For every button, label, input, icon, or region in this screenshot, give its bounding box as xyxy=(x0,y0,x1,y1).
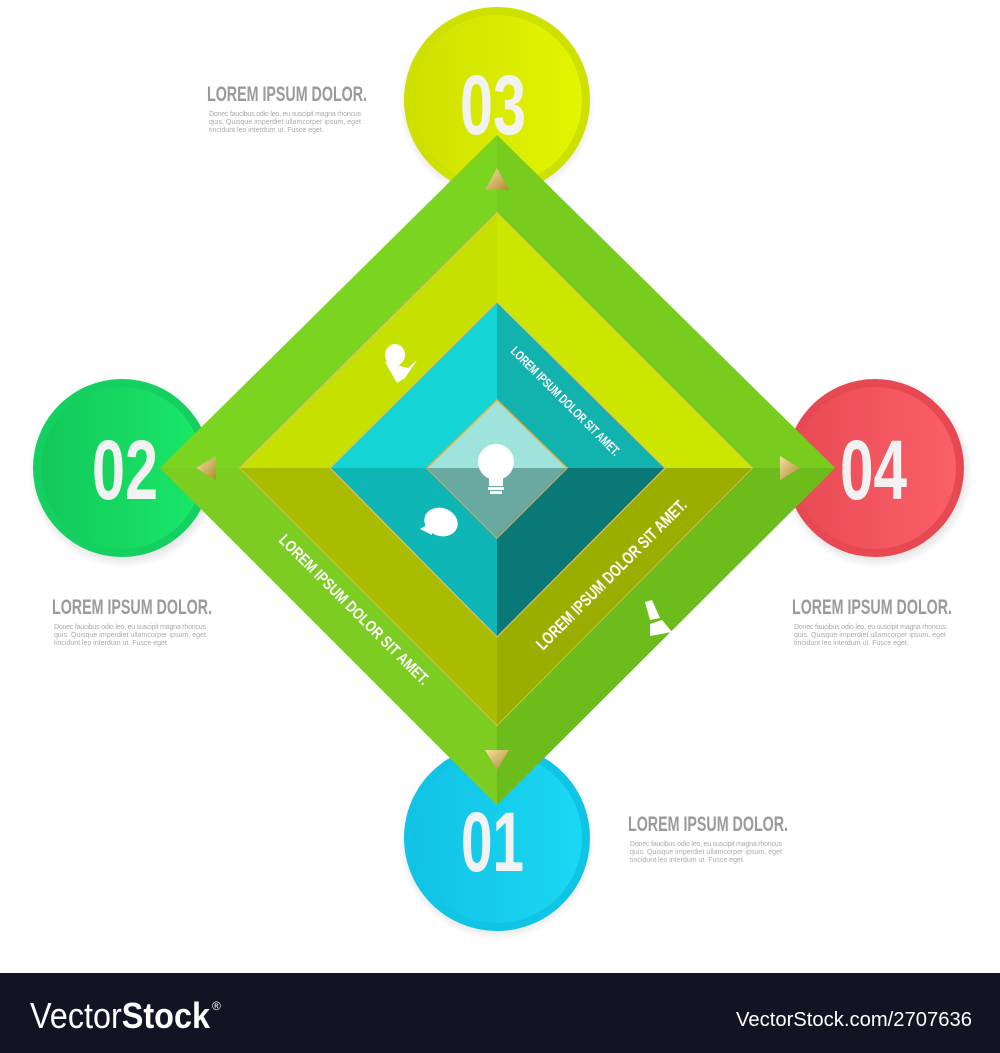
gold arrow markers xyxy=(196,168,800,770)
text block 02 xyxy=(52,596,212,647)
teal diamond xyxy=(330,302,665,637)
yellow-green diamond xyxy=(240,213,752,725)
text block 01: tincidunt leo interdum ut. Fusce eget. xyxy=(630,857,745,864)
band text: lower right: LOREM IPSUM DOLOR SIT AMET. xyxy=(532,495,691,654)
circle 03: 03 xyxy=(460,58,526,152)
text block 03: quis. Quisque imperdiet ullamcorper ipsum, eget xyxy=(209,119,361,126)
band text: teal: LOREM IPSUM DOLOR SIT AMET. xyxy=(508,344,623,459)
text block 03: Donec faucibus odio leo, eu suscipit magna rhoncus xyxy=(209,111,362,118)
text block 03: tincidunt leo interdum ut. Fusce eget. xyxy=(209,127,324,134)
text block 01: LOREM IPSUM DOLOR. xyxy=(628,813,788,836)
text block 02: quis. Quisque imperdiet ullamcorper ipsum, eget xyxy=(54,632,206,639)
circle 02 xyxy=(28,376,220,568)
inner glass diamond with bulb xyxy=(427,400,567,538)
text block 04: quis. Quisque imperdiet ullamcorper ipsum, eget xyxy=(794,632,946,639)
circle 03 xyxy=(399,6,595,202)
text block 04 xyxy=(792,596,952,647)
icon: cone xyxy=(645,600,672,636)
footer bar: ® xyxy=(212,999,221,1013)
circle 04: 04 xyxy=(840,423,907,517)
text block 04: Donec faucibus odio leo, eu suscipit magna rhoncus xyxy=(794,624,946,631)
text block 02: tincidunt leo interdum ut. Fusce eget. xyxy=(54,640,169,647)
footer bar: VectorStock xyxy=(30,995,211,1036)
text block 02: Donec faucibus odio leo, eu suscipit magna rhoncus xyxy=(54,624,206,631)
text block 03: LOREM IPSUM DOLOR. xyxy=(207,83,367,106)
circle 01 xyxy=(399,744,595,940)
text block 01: Donec faucibus odio leo, eu suscipit magna rhoncus xyxy=(630,841,782,848)
text block 02: LOREM IPSUM DOLOR. xyxy=(52,596,212,619)
text block 01: quis. Quisque imperdiet ullamcorper ipsum, eget xyxy=(630,849,782,856)
outer green diamond xyxy=(160,135,835,805)
circle 04 xyxy=(781,376,973,568)
circle 01: 01 xyxy=(461,795,524,889)
text block 03 xyxy=(207,83,367,134)
text block 01 xyxy=(628,813,788,864)
footer bar xyxy=(0,973,1000,1053)
band text: lower left: LOREM IPSUM DOLOR SIT AMET. xyxy=(275,532,432,689)
text block 04: tincidunt leo interdum ut. Fusce eget. xyxy=(794,640,909,647)
circle 02: 02 xyxy=(92,423,158,517)
footer bar: VectorStock.com/2707636 xyxy=(736,1009,972,1031)
icon: person xyxy=(385,344,417,383)
icon: speech bubble xyxy=(420,503,462,541)
icon: light bulb xyxy=(478,444,514,494)
